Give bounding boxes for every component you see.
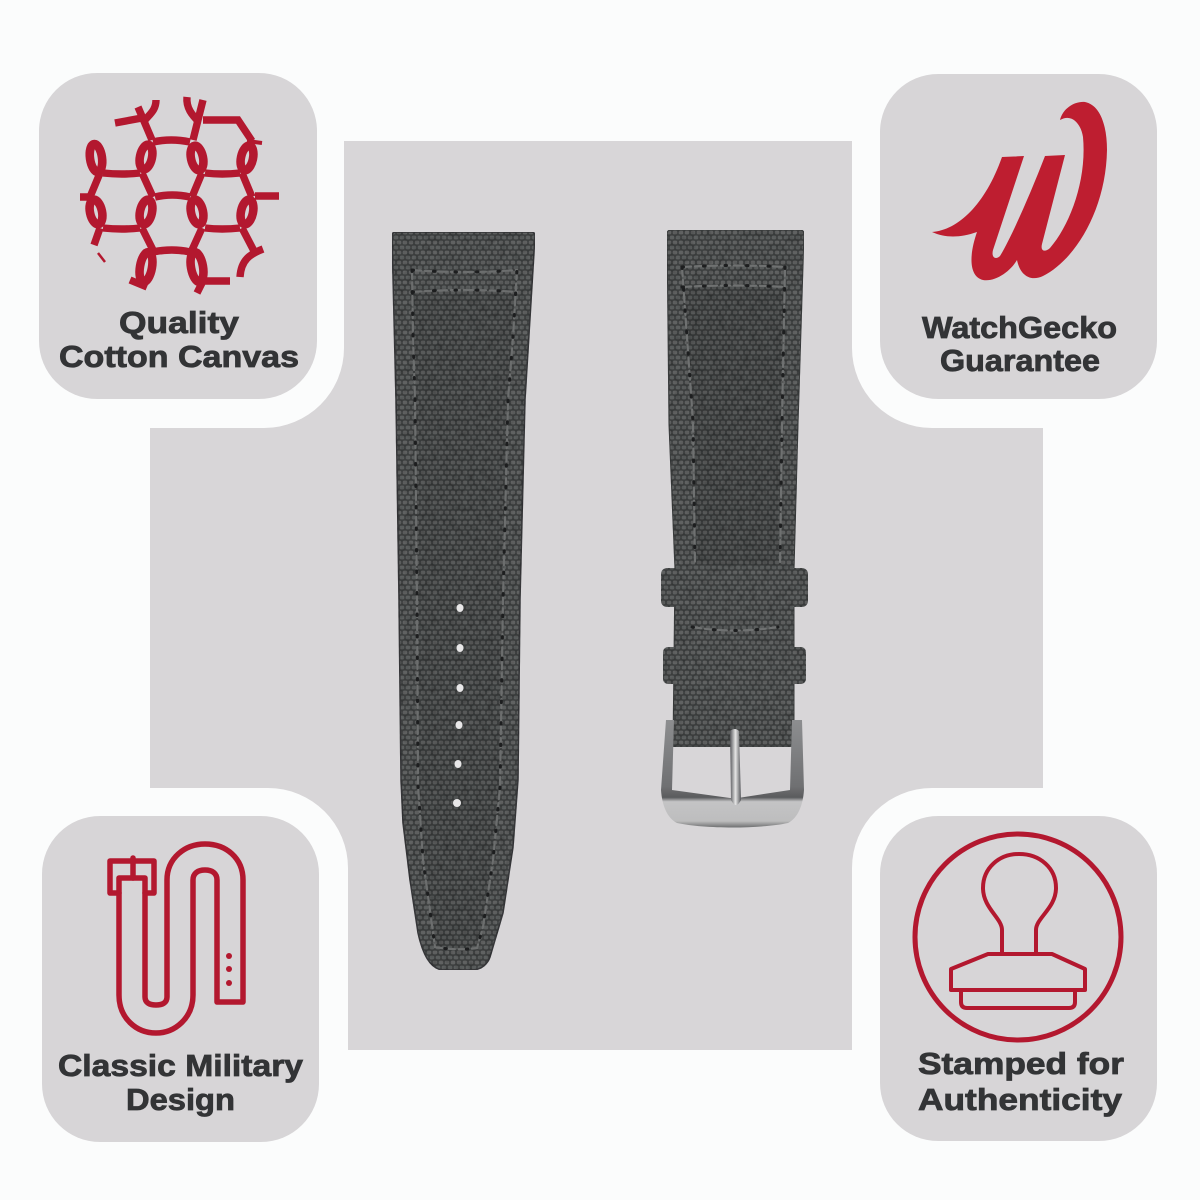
icon: W logo [932, 102, 1107, 280]
stitching on buckle piece [682, 266, 785, 630]
label: Classic Military [58, 1048, 304, 1083]
central grey cross panel [150, 141, 1043, 1050]
panel: stamped for authenticity [880, 816, 1157, 1141]
buckle frame [661, 720, 804, 828]
panel: quality cotton canvas [39, 73, 317, 399]
label [918, 1046, 1124, 1117]
icon: military belt [110, 844, 243, 1033]
strap keeper lower [663, 647, 806, 684]
strap keeper upper [661, 568, 808, 607]
label: Guarantee [940, 343, 1100, 378]
panel: watch strap buckle piece [661, 230, 808, 828]
buckle holes [453, 604, 464, 807]
label: Quality [119, 305, 240, 340]
buckle prong [730, 729, 741, 805]
label: Authenticity [918, 1082, 1123, 1117]
label [922, 310, 1117, 378]
icon: canvas weave net [80, 97, 279, 293]
panel: watchgecko guarantee [880, 74, 1157, 399]
label: WatchGecko [922, 310, 1117, 345]
label: Design [126, 1082, 235, 1117]
panel: watch strap long piece [392, 232, 535, 970]
label: Cotton Canvas [59, 339, 299, 374]
stitching on long piece [412, 270, 517, 949]
inner panel shading [412, 292, 517, 948]
label: Stamped for [918, 1046, 1124, 1081]
inner panel shading [682, 287, 785, 565]
label [58, 1048, 304, 1117]
label [59, 305, 299, 374]
panel: classic military design [42, 816, 319, 1142]
icon: rubber stamp in circle [915, 834, 1121, 1040]
